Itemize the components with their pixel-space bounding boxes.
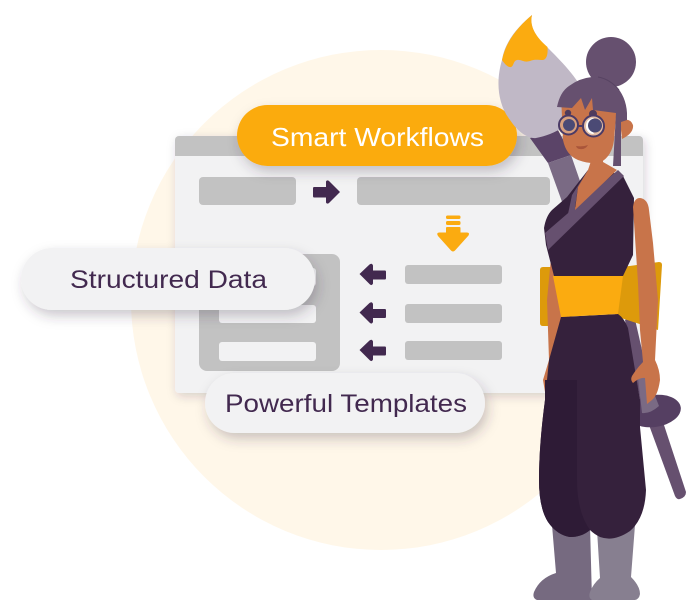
pill: Structured Data: Structured Data	[70, 266, 267, 294]
source field	[199, 177, 296, 205]
paint on brush tip	[502, 15, 548, 67]
neck	[575, 158, 617, 210]
sash bow, back	[540, 262, 662, 330]
tunic collar	[545, 170, 624, 250]
face	[561, 95, 618, 163]
bun	[586, 37, 636, 87]
sword	[625, 315, 686, 499]
left arm	[543, 258, 570, 402]
paintbrush handle	[530, 130, 590, 210]
arrow: down	[437, 216, 469, 252]
pill: Powerful Templates	[205, 373, 485, 433]
form input rows	[219, 268, 316, 361]
application window	[175, 136, 643, 393]
eyebrows	[565, 110, 571, 116]
lips	[576, 145, 588, 149]
paintbrush bristles	[498, 15, 585, 138]
right arm	[631, 198, 660, 404]
background circle	[131, 50, 631, 550]
trouser back leg shade	[539, 380, 590, 537]
arrow: right	[313, 180, 340, 204]
hair	[557, 77, 627, 166]
boots	[533, 525, 592, 600]
form panel	[199, 254, 340, 371]
arrows: left	[360, 264, 386, 361]
pill: Smart Workflows	[237, 105, 517, 166]
target field	[357, 177, 550, 205]
window title bar	[175, 136, 643, 156]
sash	[553, 276, 623, 317]
glasses	[559, 116, 604, 136]
pill: Smart Workflows: Smart Workflows	[271, 122, 484, 152]
trousers	[539, 314, 646, 539]
output rows	[405, 265, 502, 360]
hair bun seam	[598, 77, 619, 90]
pill: Structured Data	[21, 248, 315, 310]
ninja character with giant paintbrush	[498, 15, 686, 600]
ear	[620, 120, 633, 139]
tunic	[544, 170, 634, 276]
pill: Powerful Templates: Powerful Templates	[225, 390, 467, 418]
